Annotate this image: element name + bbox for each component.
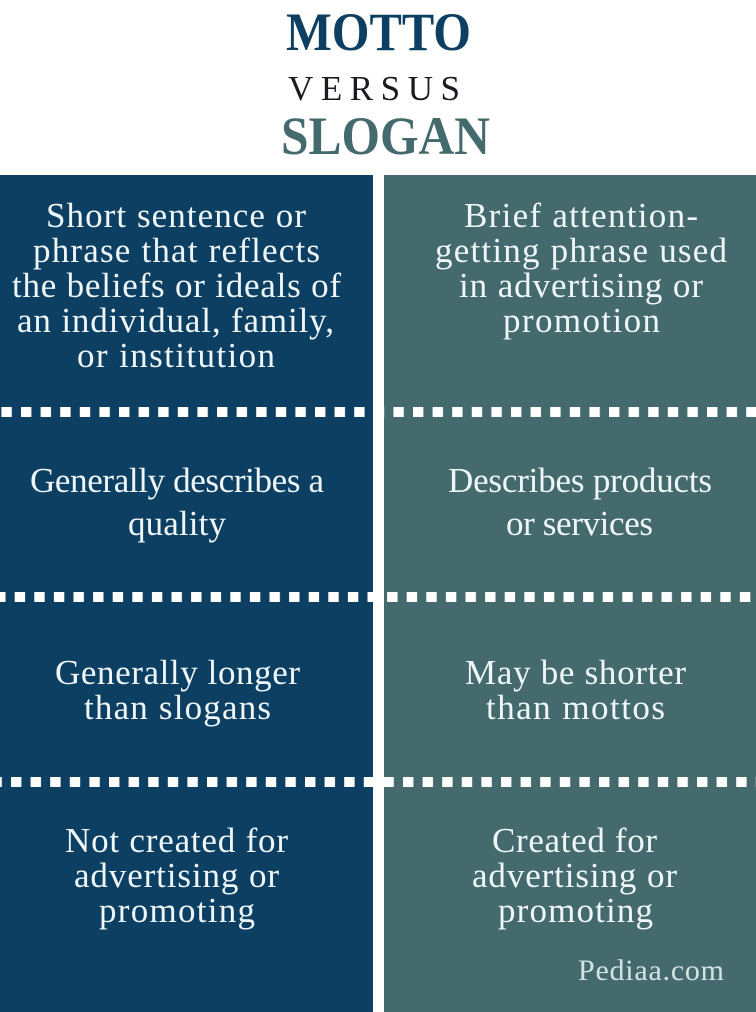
text: slogan purpose: advertising or <box>472 856 677 895</box>
text: motto definition: an individual, family, <box>17 301 334 340</box>
text: slogan length: May be shorter <box>465 653 686 692</box>
text: motto describes: Generally describes a <box>30 461 324 500</box>
text: motto length: Generally longer <box>55 653 300 692</box>
heading: slogan: SLOGAN <box>281 106 490 166</box>
text: slogan length: than mottos <box>486 688 665 727</box>
text: motto definition: phrase that reflects <box>33 231 320 270</box>
panel: slogan column <box>384 175 756 1012</box>
text: slogan definition: promotion <box>503 301 660 340</box>
text: motto definition: Short sentence or <box>46 196 306 235</box>
text: motto definition: the beliefs or ideals of <box>12 266 341 305</box>
panel: motto column <box>0 175 373 1012</box>
text: motto length: than slogans <box>84 688 271 727</box>
text: motto definition: or institution <box>77 336 275 375</box>
text: slogan describes: Describes products <box>448 461 712 500</box>
text: slogan definition: Brief attention- <box>464 196 698 235</box>
text: slogan definition: in advertising or <box>459 266 703 305</box>
text: slogan definition: getting phrase used <box>435 231 728 270</box>
text: motto purpose: Not created for <box>65 821 288 860</box>
text: slogan describes: or services <box>506 504 653 543</box>
heading: versus: VERSUS <box>288 69 460 108</box>
text: motto purpose: promoting <box>99 891 255 930</box>
title: motto versus slogan <box>281 2 490 166</box>
text: slogan purpose: promoting <box>498 891 653 930</box>
heading: motto: MOTTO <box>286 2 471 62</box>
text: slogan purpose: Created for <box>492 821 657 860</box>
text: motto describes: quality <box>128 504 226 543</box>
text: motto purpose: advertising or <box>74 856 279 895</box>
logo: Pediaa.com: Pediaa.com <box>578 954 724 987</box>
